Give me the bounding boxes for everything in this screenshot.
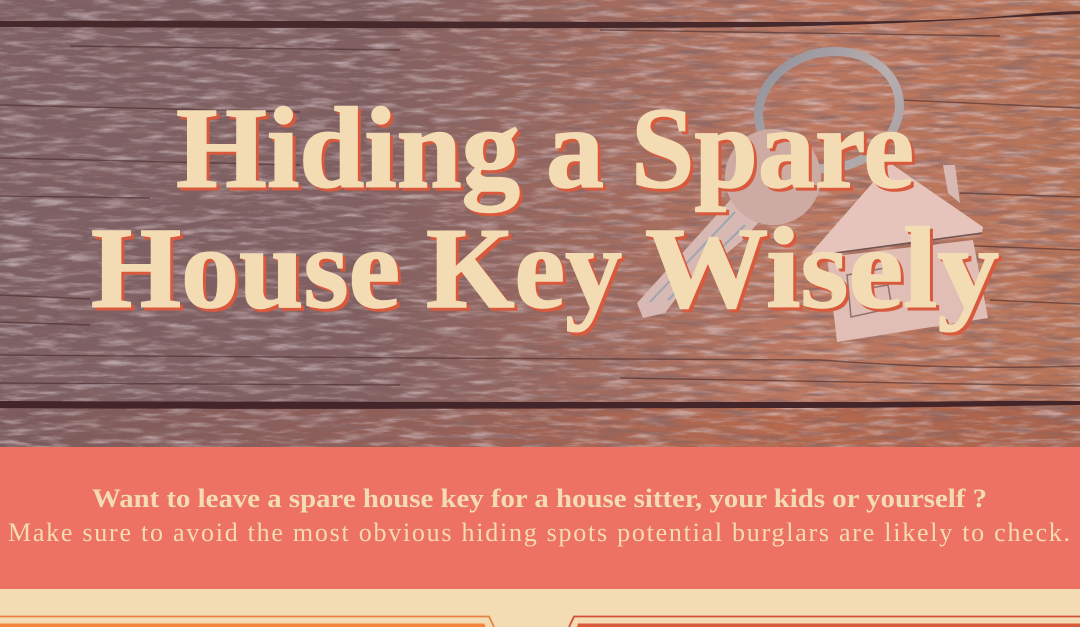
title: Spare <box>631 85 914 212</box>
cream section <box>0 589 1080 627</box>
title: Wisely <box>645 205 999 332</box>
left panel top edge <box>0 616 494 627</box>
key ring and house keychain <box>637 39 988 342</box>
title: a <box>546 85 604 212</box>
right panel top edge <box>569 616 1080 627</box>
icon: key <box>637 129 821 318</box>
icon: house tag <box>812 163 988 342</box>
intro heading: Want to leave a spare house key for a house sitter, your kids or yourself ? <box>92 484 987 513</box>
title <box>91 85 999 332</box>
title: Key <box>426 205 622 332</box>
title: Hiding <box>176 85 520 212</box>
header photo: wooden planks <box>0 0 1080 447</box>
intro band <box>0 447 1080 589</box>
icon: metal key ring <box>747 39 911 181</box>
intro text: Make sure to avoid the most obvious hiding spots potential burglars are likely to check. <box>8 518 1070 547</box>
title: House <box>91 205 400 332</box>
